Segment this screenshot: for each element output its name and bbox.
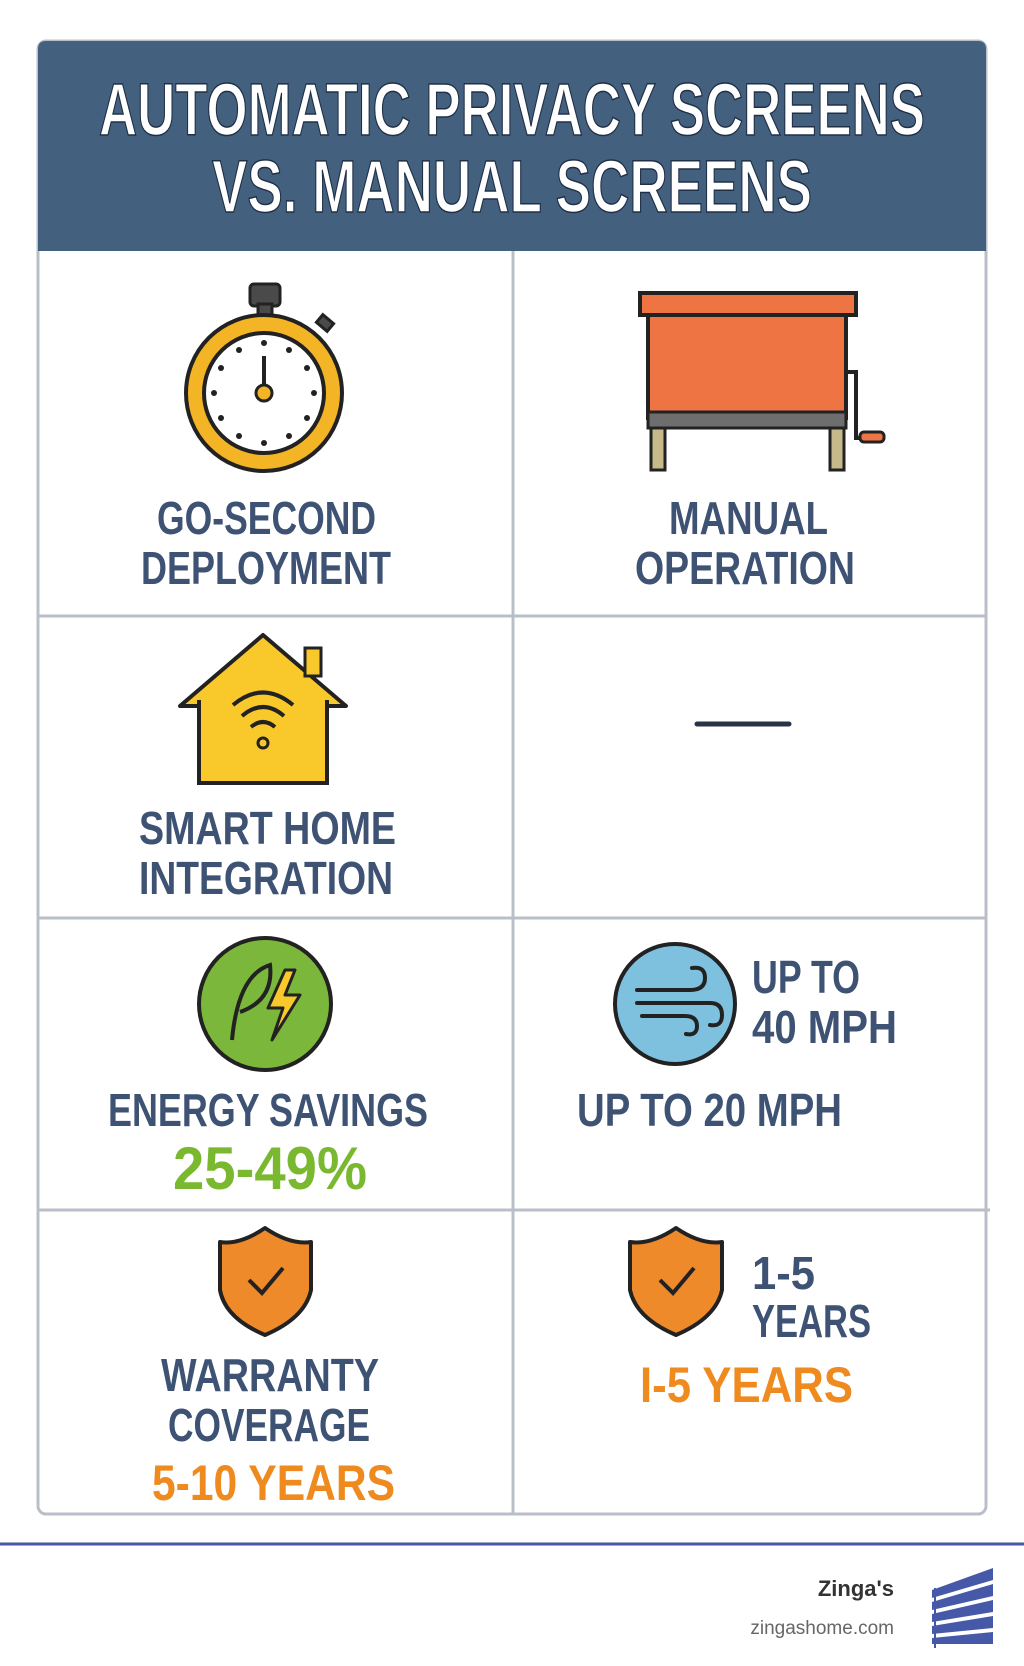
- label: wind resistance: 40 MPH: [752, 1001, 897, 1053]
- icon: stopwatch: [186, 284, 342, 471]
- label: warranty coverage: COVERAGE: [168, 1399, 370, 1451]
- icon: energy leaf bolt: [199, 938, 331, 1070]
- label: manual warranty: I-5 YEARS: [640, 1357, 853, 1413]
- icon: wind: [615, 944, 735, 1064]
- label: energy savings: [108, 1084, 428, 1202]
- label: warranty coverage: WARRANTY: [161, 1349, 379, 1401]
- title banner: [38, 41, 986, 251]
- label: manual operation: OPERATION: [635, 542, 855, 594]
- label: warranty coverage: 5-10 YEARS: [152, 1455, 395, 1511]
- icon: shield left: [220, 1228, 311, 1335]
- label: 60-second deployment: GO-SECOND: [157, 492, 376, 544]
- label: smart home integration: SMART HOME: [139, 802, 396, 854]
- icon: shield right: [630, 1228, 722, 1335]
- label: smart home integration: INTEGRATION: [139, 852, 393, 904]
- label: manual warranty: YEARS: [752, 1295, 871, 1347]
- footer brand: Zinga's: [818, 1576, 894, 1601]
- label: manual operation: [635, 492, 855, 594]
- label: wind resistance: UP TO 20 MPH: [577, 1084, 842, 1136]
- label: 60-second deployment: DEPLOYMENT: [141, 542, 391, 594]
- label: 60-second deployment: [141, 492, 391, 594]
- label: energy savings: ENERGY SAVINGS: [108, 1084, 428, 1136]
- label: manual operation: MANUAL: [669, 492, 828, 544]
- label: smart home integration: [139, 802, 396, 904]
- icon: smart home: [180, 635, 346, 783]
- dash: not available: [697, 722, 789, 726]
- label: warranty coverage: [152, 1349, 395, 1511]
- label: manual warranty: 1-5: [752, 1247, 815, 1299]
- label: energy savings: 25-49%: [173, 1135, 367, 1202]
- label: manual warranty: [640, 1247, 871, 1413]
- icon: manual screen with crank: [640, 293, 884, 470]
- label: wind resistance: [577, 951, 897, 1136]
- label: wind resistance: UP TO: [752, 951, 860, 1003]
- footer brand: [750, 1576, 894, 1639]
- icon: blinds logo: [932, 1568, 993, 1648]
- footer brand: zingashome.com: [750, 1618, 894, 1639]
